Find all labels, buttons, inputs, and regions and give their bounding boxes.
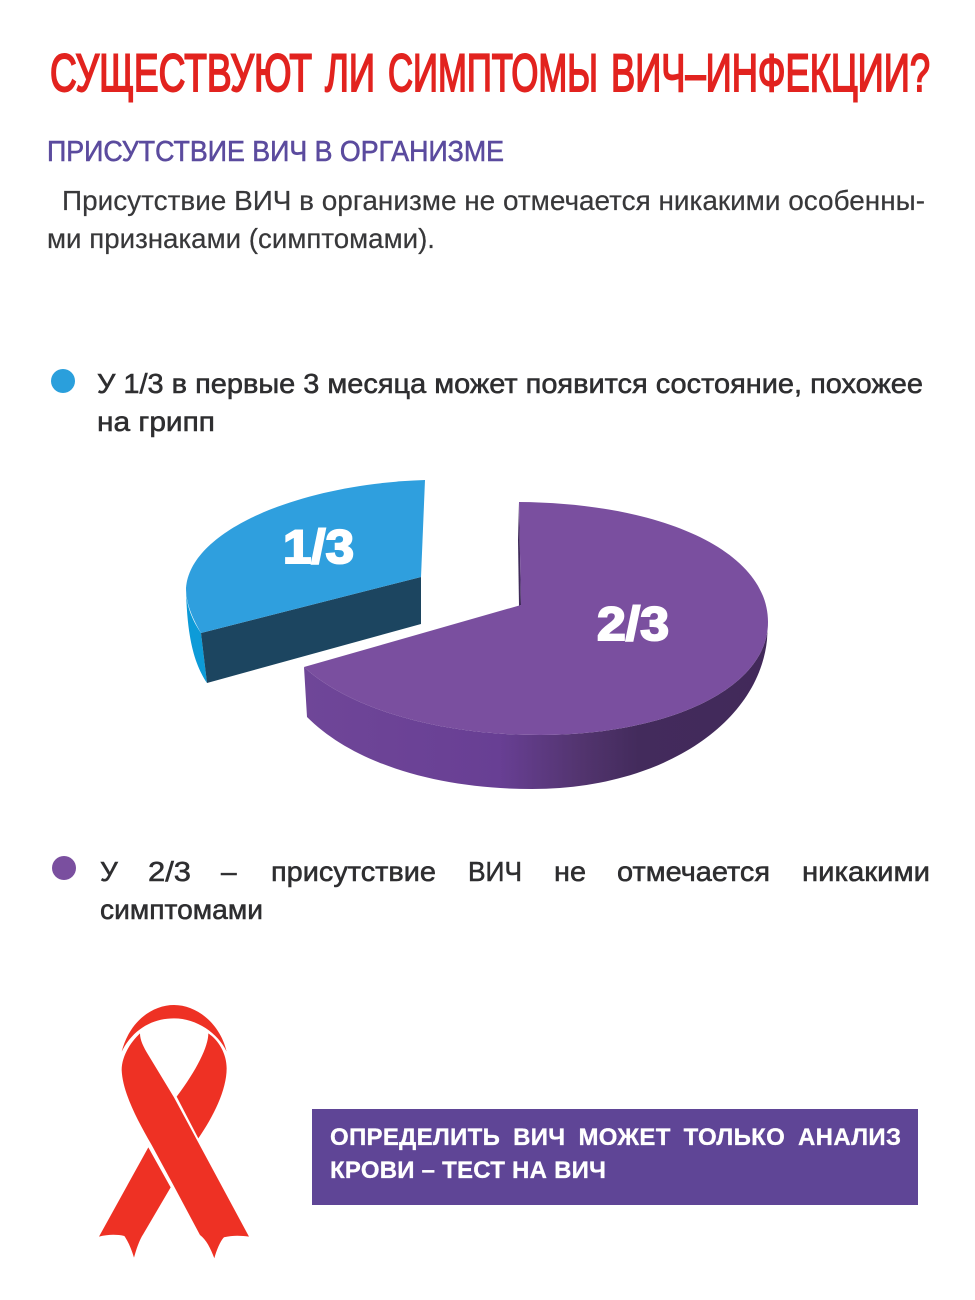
section heading: ПРИСУТСТВИЕ ВИЧ В ОРГАНИЗМЕ xyxy=(47,136,504,168)
slice: one third xyxy=(186,480,425,683)
title: ЛИ xyxy=(325,44,375,103)
bullet text: two thirds: отмечается xyxy=(617,856,770,887)
intro text: ми признаками (симптомами). xyxy=(47,223,435,254)
pie chart xyxy=(186,480,768,789)
title: СУЩЕСТВУЮТ xyxy=(50,44,312,103)
bullet text: one third: У 1/3 в первые 3 месяца может появится состояние, похожее xyxy=(97,368,923,399)
icon: red awareness ribbon xyxy=(99,1005,249,1258)
bullet text: two thirds: симптомами xyxy=(100,894,263,925)
callout text: КРОВИ – ТЕСТ НА ВИЧ xyxy=(330,1157,606,1184)
bullet text: two thirds: присутствие xyxy=(271,856,436,887)
bullet: blue dot xyxy=(51,369,75,393)
bullet text: two thirds: – xyxy=(221,856,237,887)
bullet: purple dot xyxy=(52,856,76,880)
bullet text: two thirds: ВИЧ xyxy=(468,856,522,887)
slice: two thirds xyxy=(304,502,768,789)
bullet text: two thirds: не xyxy=(554,856,586,887)
bullet text: two thirds: У xyxy=(100,856,118,887)
title: СИМПТОМЫ xyxy=(388,44,598,103)
bullet text: one third xyxy=(97,368,923,437)
callout text: ОПРЕДЕЛИТЬ ВИЧ МОЖЕТ ТОЛЬКО АНАЛИЗ xyxy=(330,1124,901,1151)
callout text xyxy=(330,1124,901,1184)
callout box xyxy=(312,1109,918,1205)
label: 1/3: 1/3 xyxy=(283,520,354,573)
intro text xyxy=(47,185,925,254)
label: 2/3: 2/3 xyxy=(597,597,669,650)
bullet text: two thirds xyxy=(100,856,930,925)
title xyxy=(50,44,930,103)
bullet text: two thirds: никакими xyxy=(802,856,930,887)
intro text: Присутствие ВИЧ в организме не отмечается никакими особенны- xyxy=(62,185,925,216)
bullet text: one third: на грипп xyxy=(97,406,215,437)
bullet text: two thirds: 2/3 xyxy=(148,856,191,887)
